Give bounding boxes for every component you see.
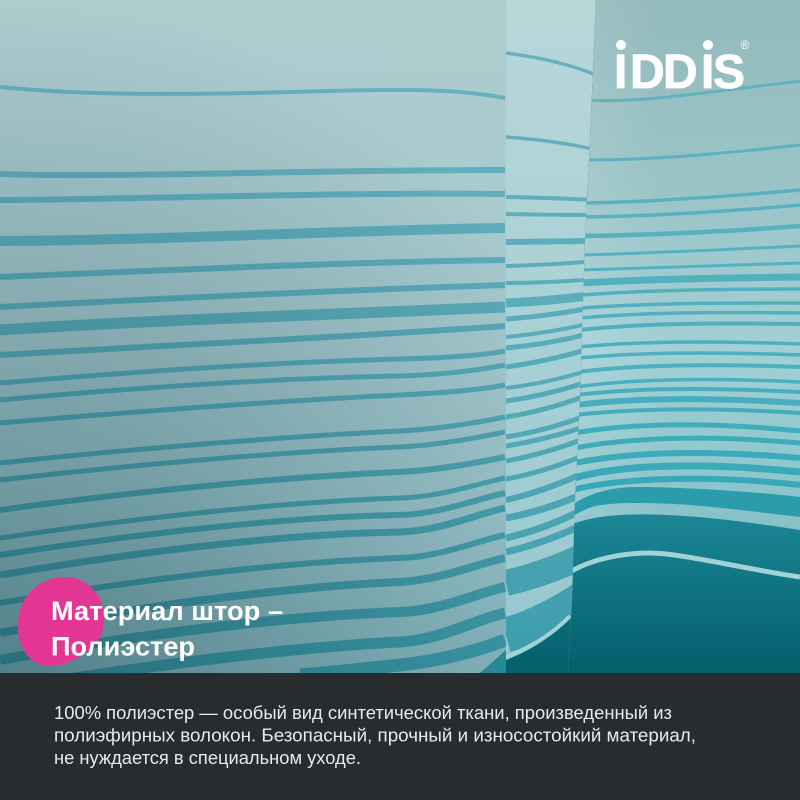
text block: description: полиэфирных волокон. Безопасный, прочный и износостойкий материал, <box>54 726 696 746</box>
curtain panel: left fold <box>0 0 506 690</box>
text block: description <box>54 703 696 768</box>
heading <box>51 596 283 662</box>
logo: iDDiS: IDDIS <box>614 46 745 99</box>
logo: iDDiS: ® <box>740 38 750 52</box>
heading: Материал штор – <box>51 596 283 626</box>
curtain panel: middle fold <box>506 0 598 673</box>
heading: Полиэстер <box>51 632 195 662</box>
curtain panel: right fold <box>565 0 800 673</box>
icon: pink blob <box>18 577 104 666</box>
text block: description: не нуждается в специальном уходе. <box>54 748 361 768</box>
text block: description: 100% полиэстер — особый вид синтетической ткани, произведенный из <box>54 703 672 723</box>
panel: description band <box>0 673 800 800</box>
